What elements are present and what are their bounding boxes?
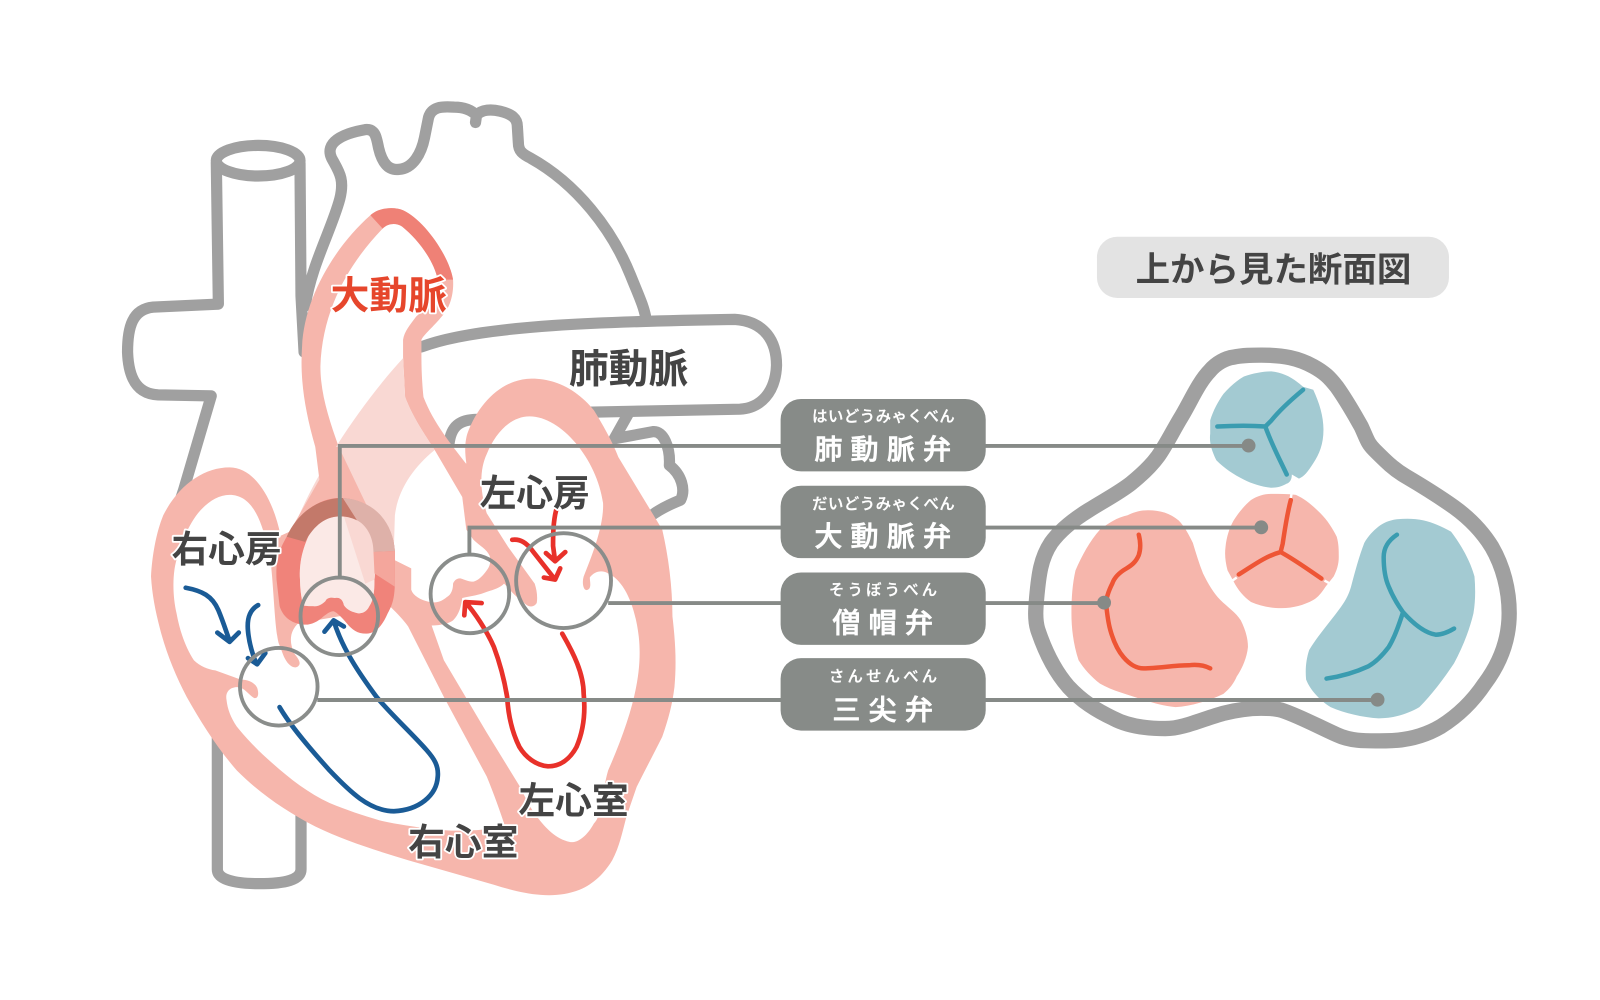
pulmonary valve cross-section	[1210, 371, 1323, 488]
pulmonary valve seams	[1217, 390, 1303, 474]
ring top left, dark	[287, 498, 357, 542]
tricuspid valve seams	[1327, 535, 1454, 679]
label: aorta: 大動脈	[331, 275, 447, 318]
pill: mitral valve: 僧帽弁	[832, 608, 941, 639]
pill: tricuspid valve: さんせんべん	[829, 669, 940, 686]
pill: aortic valve: 大動脈弁	[814, 521, 959, 552]
pill: aortic valve: だいどうみゃくべん	[812, 496, 955, 513]
aortic valve cross-section	[1225, 492, 1339, 608]
mitral valve seam	[1106, 535, 1210, 668]
aortic valve seams	[1239, 500, 1321, 579]
interior pale overlap	[344, 516, 375, 584]
label: pulmonary artery: 肺動脈	[569, 348, 688, 392]
blood flow arrows, red	[464, 510, 584, 766]
aorta interior	[320, 224, 490, 602]
pill: pulmonary valve	[781, 399, 986, 471]
label: left ventricle: 左心室	[518, 780, 629, 821]
heart muscle silhouette	[151, 379, 676, 895]
heading pill: 上から見た断面図	[1136, 252, 1411, 290]
aortic arch highlighted segment	[370, 208, 453, 280]
pill: mitral valve	[781, 572, 986, 645]
label: left atrium: 左心房	[480, 473, 590, 514]
aorta wall	[302, 208, 490, 551]
aortic valve slits	[1230, 492, 1334, 586]
pulmonary trunk translucent cone	[286, 358, 435, 582]
valve name pills	[781, 399, 986, 731]
leader endpoints	[1097, 439, 1384, 707]
cross-section outline	[1036, 355, 1509, 741]
pill: tricuspid valve	[781, 658, 986, 731]
mitral valve cross-section	[1071, 510, 1248, 707]
leader lines	[317, 446, 1378, 700]
tricuspid valve cross-section	[1306, 519, 1475, 718]
grey vessel outlines	[128, 107, 777, 884]
valve circles	[240, 533, 611, 726]
ring right side, light	[373, 551, 395, 587]
cross-section view from above	[1036, 355, 1509, 741]
pill: mitral valve: そうぼうべん	[829, 582, 940, 599]
blood flow arrows, blue	[186, 588, 438, 811]
valve ring interior	[300, 516, 375, 613]
lower aorta wall	[287, 447, 395, 592]
right atrium and right ventricle chamber	[173, 495, 505, 831]
pill: pulmonary valve: 肺動脈弁	[814, 434, 959, 465]
label: right ventricle: 右心室	[408, 822, 518, 863]
pill: tricuspid valve: 三尖弁	[832, 694, 941, 725]
label: right atrium: 右心房	[171, 529, 282, 570]
pill: aortic valve	[781, 486, 986, 558]
pulmonary valve ring	[276, 498, 395, 634]
pill: pulmonary valve: はいどうみゃくべん	[812, 408, 955, 425]
left atrium and left ventricle chamber	[432, 416, 640, 842]
heart diagram	[128, 107, 777, 895]
heading pill	[1097, 237, 1449, 298]
ring top right, light	[343, 498, 395, 552]
chamber and vessel labels	[171, 275, 688, 863]
